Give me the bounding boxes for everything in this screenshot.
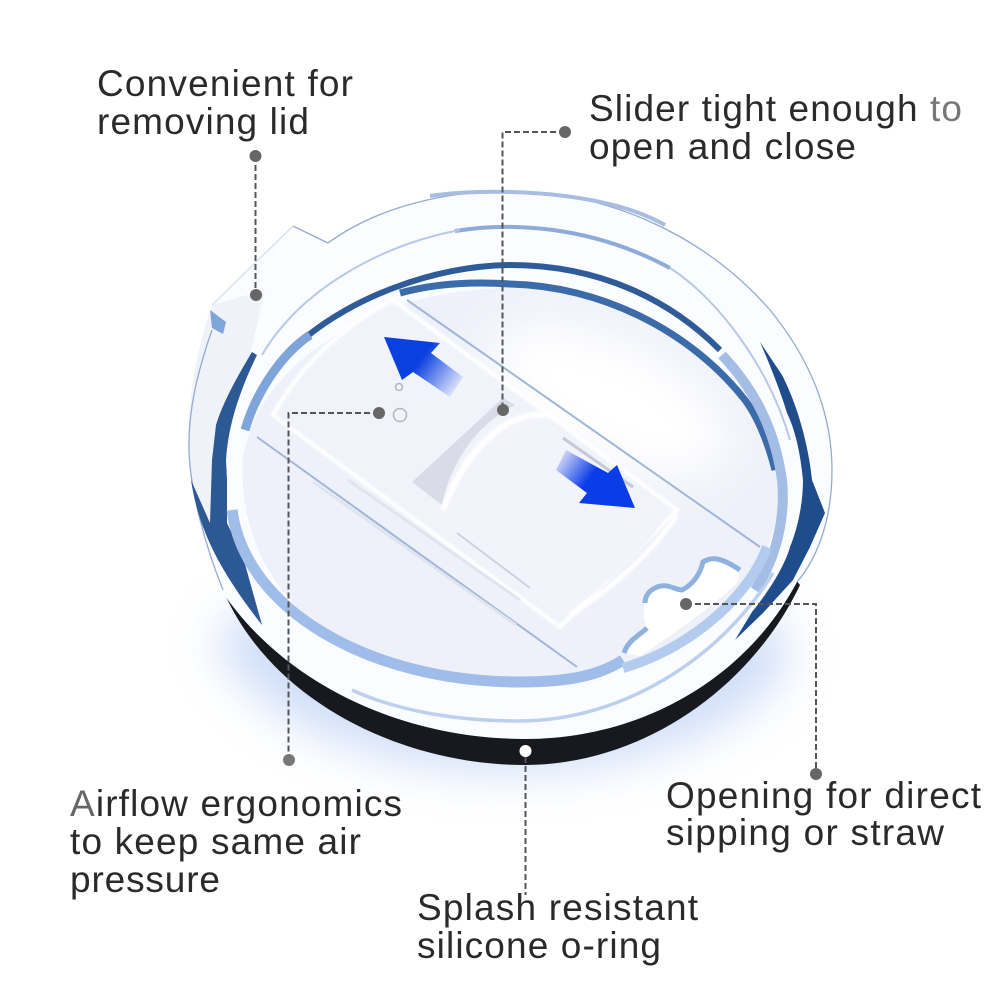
dark band left bbox=[191, 352, 262, 625]
label: airflow ergonomics: pressure bbox=[70, 859, 220, 900]
label: airflow ergonomics: Airflow ergonomics bbox=[70, 783, 402, 824]
upper-left light blue band bbox=[245, 335, 310, 430]
vent holes bbox=[394, 384, 406, 422]
sipping opening bbox=[623, 559, 740, 656]
leader: slider bbox=[497, 126, 571, 416]
label: convenient for removing lid bbox=[97, 63, 353, 142]
dome edge highlight bbox=[443, 415, 557, 510]
outer rim outline bbox=[189, 191, 832, 590]
left rim lavender shading bbox=[189, 290, 265, 545]
slider track bbox=[257, 300, 760, 667]
label: slider tight enough bbox=[589, 88, 962, 167]
leader: removing lid bbox=[250, 150, 262, 301]
shadow glow under lid bbox=[215, 600, 790, 770]
dark band upper inner bbox=[400, 283, 775, 470]
label: convenient for removing lid: Convenient for bbox=[97, 63, 353, 104]
outer lid body bbox=[188, 191, 832, 739]
lower right blue band bbox=[623, 547, 767, 668]
label: splash resistant: Splash resistant bbox=[417, 887, 699, 928]
dome bbox=[442, 412, 665, 617]
label: splash resistant bbox=[417, 887, 699, 966]
label: convenient for removing lid: removing lid bbox=[97, 101, 309, 142]
second rim blue stroke bbox=[455, 227, 670, 268]
inner clear disk bbox=[243, 288, 780, 682]
second rim thin line bbox=[262, 230, 790, 440]
light blue left band bbox=[232, 510, 623, 682]
dome lower rail bbox=[457, 533, 530, 588]
label: airflow ergonomics: to keep same air bbox=[70, 821, 361, 862]
dome upper rail bbox=[563, 438, 633, 487]
dark band right bbox=[735, 342, 825, 640]
slider shaded wedge under dome bbox=[412, 398, 515, 505]
tab notch bbox=[210, 310, 226, 334]
arrow: slide close down-right bbox=[556, 450, 635, 508]
label: slider tight enough: Slider tight enough to bbox=[589, 88, 962, 129]
slider plate bbox=[273, 300, 677, 627]
label: opening for direct sipping: sipping or straw bbox=[666, 812, 944, 853]
label: opening for direct sipping: Opening for direct bbox=[666, 775, 982, 816]
disk highlight bbox=[467, 291, 753, 509]
tab edge bbox=[212, 226, 293, 305]
lid bbox=[188, 191, 832, 765]
slider lower rail bbox=[313, 480, 520, 625]
dark band upper outer bbox=[305, 265, 720, 350]
lower rim faint band bbox=[352, 573, 773, 721]
label: splash resistant: silicone o-ring bbox=[417, 925, 661, 966]
dome lower right highlight bbox=[570, 515, 677, 615]
arrow: slide open up-left bbox=[384, 337, 463, 397]
leader: opening bbox=[680, 598, 822, 780]
black silicone o-ring bbox=[223, 560, 800, 765]
leader: airflow bbox=[283, 407, 385, 766]
opening blue edge bbox=[624, 559, 740, 653]
label: slider tight enough: open and close bbox=[589, 126, 856, 167]
label: opening for direct sipping bbox=[666, 775, 982, 853]
label: airflow ergonomics bbox=[70, 783, 402, 900]
right mottled band bbox=[722, 355, 783, 590]
upper rim blue stroke bbox=[430, 192, 665, 225]
leader: o-ring bbox=[520, 745, 532, 895]
